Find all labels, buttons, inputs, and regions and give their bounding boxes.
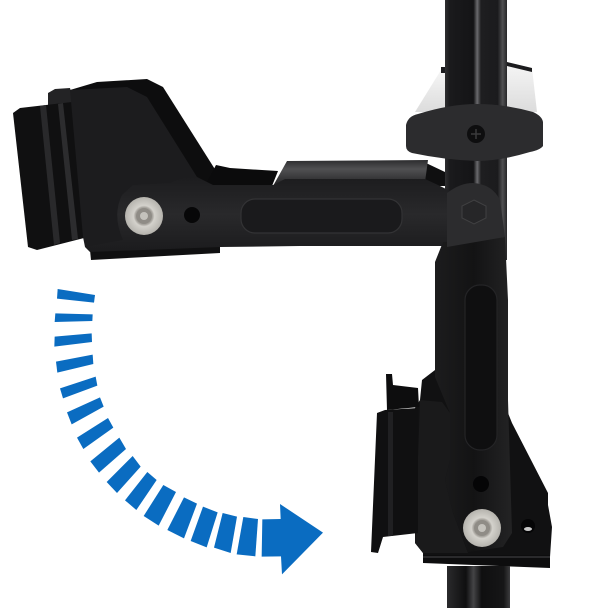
dashed curved blue arrow	[54, 289, 323, 574]
lower clamp pad	[371, 374, 419, 553]
main pivot plate	[70, 87, 213, 247]
lower rotated plate	[415, 400, 468, 553]
lower holes	[473, 476, 535, 533]
lower pivot screw	[463, 509, 501, 547]
lower pole	[447, 566, 510, 608]
horizontal arm	[85, 177, 448, 252]
hinge with hex bolt	[447, 183, 505, 247]
upper pole with rear clamp	[415, 0, 537, 260]
left clamp pad	[13, 88, 88, 250]
arm hole	[184, 207, 200, 223]
clamp knob with screw	[406, 104, 543, 161]
upper bracket: rear plate	[70, 79, 445, 186]
lower plate extra strip	[423, 556, 550, 558]
bottom edge strip	[90, 245, 220, 260]
lower bottom strip	[423, 555, 550, 568]
lower bracket silhouette	[415, 370, 552, 557]
lower bracket vertical	[435, 237, 512, 552]
upper bracket: top plate	[273, 160, 430, 186]
left pivot screw	[125, 197, 163, 235]
